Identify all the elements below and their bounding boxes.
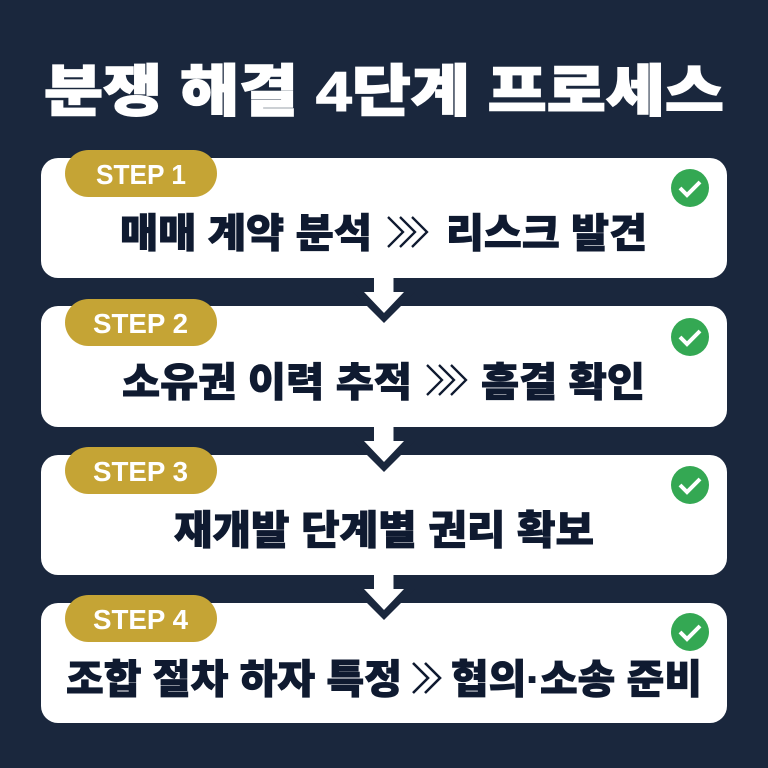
step 2 text: ownership history: 소유권 이력 추적	[122, 361, 412, 405]
arrow: step 2 to 3	[353, 427, 415, 472]
icon: check badge	[671, 169, 709, 207]
icon: triple chevron	[388, 217, 427, 247]
panel: step 4	[41, 595, 727, 723]
step 3 badge	[65, 447, 217, 494]
step 4 text: negotiation and litigation: 협의·소송 준비	[451, 658, 702, 702]
step 3 text: 재개발 단계별 권리 확보	[174, 509, 594, 553]
step 1 badge: STEP 1	[96, 159, 186, 190]
icon: check badge	[671, 466, 709, 504]
arrow: step 3 to 4	[353, 575, 415, 620]
title: 분쟁 해결 4단계 프로세스	[44, 60, 724, 123]
step 1 text: risk found: 리스크 발견	[446, 212, 647, 256]
step 4 badge	[65, 595, 217, 642]
icon: check badge	[671, 318, 709, 356]
icon: triple chevron	[427, 365, 466, 395]
step 4 text: association procedure defects: 조합 절차 하자 특정	[66, 658, 402, 702]
icon: double chevron	[413, 663, 440, 693]
step 3 badge: STEP 3	[93, 456, 188, 487]
step 1 badge	[65, 150, 217, 197]
panel: step 2	[41, 299, 727, 427]
panel: step 1	[41, 150, 727, 278]
step 2 badge: STEP 2	[93, 308, 188, 339]
step 2 text: defect check: 흠결 확인	[481, 361, 645, 405]
arrow: step 1 to 2	[353, 278, 415, 323]
step 1 text: contract analysis: 매매 계약 분석	[120, 212, 372, 256]
icon: check badge	[671, 613, 709, 651]
panel: step 3	[41, 447, 727, 575]
step 2 badge	[65, 299, 217, 346]
step 4 badge: STEP 4	[93, 604, 188, 635]
